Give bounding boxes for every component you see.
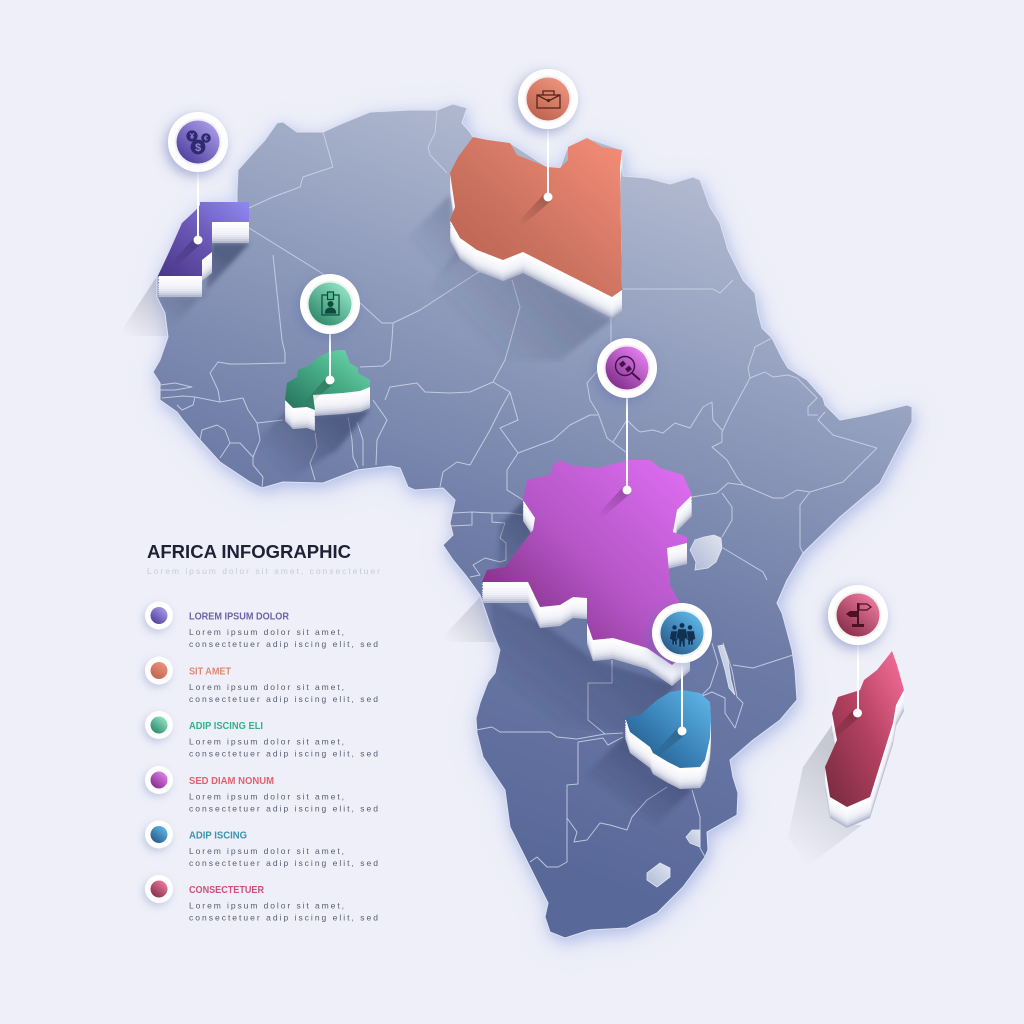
lakes and enclaves [647, 535, 735, 887]
country: Zimbabwe (blue) [625, 690, 711, 789]
pin: Western Sahara [168, 112, 228, 244]
legend item 4: consectetuer adip iscing elit, sed [189, 804, 378, 814]
on-map cast shadows [155, 195, 692, 825]
legend item 6: CONSECTETUER [189, 885, 265, 896]
legend item 2: Lorem ipsum dolor sit amet, [189, 682, 344, 692]
legend item 3: ADIP ISCING ELI [189, 721, 263, 732]
country borders [160, 110, 877, 867]
map: Africa [153, 104, 912, 938]
legend item 5: ADIP ISCING [189, 830, 247, 842]
legend item 4: SED DIAM NONUM [189, 776, 274, 787]
off-map cast shadows [118, 276, 862, 867]
icon: ID badge [322, 292, 339, 315]
country: Burkina Faso (green) [285, 350, 370, 431]
legend item 5 [145, 820, 378, 868]
legend item 1: Lorem ipsum dolor sit amet, [189, 627, 344, 637]
pin: DR Congo [597, 338, 657, 494]
country: Madagascar (red) [825, 651, 904, 828]
icon: three people [670, 623, 696, 647]
map glow [155, 108, 914, 945]
legend item 1 [145, 602, 378, 649]
title: AFRICA INFOGRAPHIC [147, 541, 351, 562]
legend item 6 [145, 875, 378, 922]
pin: Libya [518, 69, 578, 202]
legend item 2: consectetuer adip iscing elit, sed [189, 694, 378, 704]
legend item 5: Lorem ipsum dolor sit amet, [189, 846, 344, 856]
legend item 3: Lorem ipsum dolor sit amet, [189, 736, 344, 746]
country: DR Congo (magenta) [482, 460, 692, 686]
country: Western Sahara (purple) [158, 202, 249, 297]
legend item 4: Lorem ipsum dolor sit amet, [189, 792, 344, 802]
icon: coins: $ [195, 142, 201, 154]
legend item 1: consectetuer adip iscing elit, sed [189, 639, 378, 649]
pin: Madagascar [828, 585, 888, 718]
legend item 3: consectetuer adip iscing elit, sed [189, 748, 378, 758]
icon: coins: € [204, 136, 208, 142]
legend item 2: SIT AMET [189, 666, 231, 678]
legend item 6: Lorem ipsum dolor sit amet, [189, 900, 344, 910]
legend item 5: consectetuer adip iscing elit, sed [189, 858, 378, 868]
icon: magnifier [616, 356, 640, 380]
legend item 3 [145, 711, 378, 758]
legend item 1: LOREM IPSUM DOLOR [189, 612, 290, 622]
legend item 4 [145, 766, 378, 814]
pin: Burkina Faso [300, 274, 360, 384]
pin: Zimbabwe [652, 603, 712, 736]
subtitle: Lorem ipsum dolor sit amet, consectetuer [147, 566, 380, 576]
pin shadows on countries [172, 193, 861, 756]
legend item 6: consectetuer adip iscing elit, sed [189, 912, 378, 922]
icon: signpost [846, 603, 871, 627]
icon: coins: ¥ [190, 132, 195, 141]
country: Libya (orange) [450, 137, 622, 318]
icon: coins [186, 130, 211, 154]
legend item 2 [145, 656, 378, 704]
icon: briefcase [537, 91, 560, 108]
